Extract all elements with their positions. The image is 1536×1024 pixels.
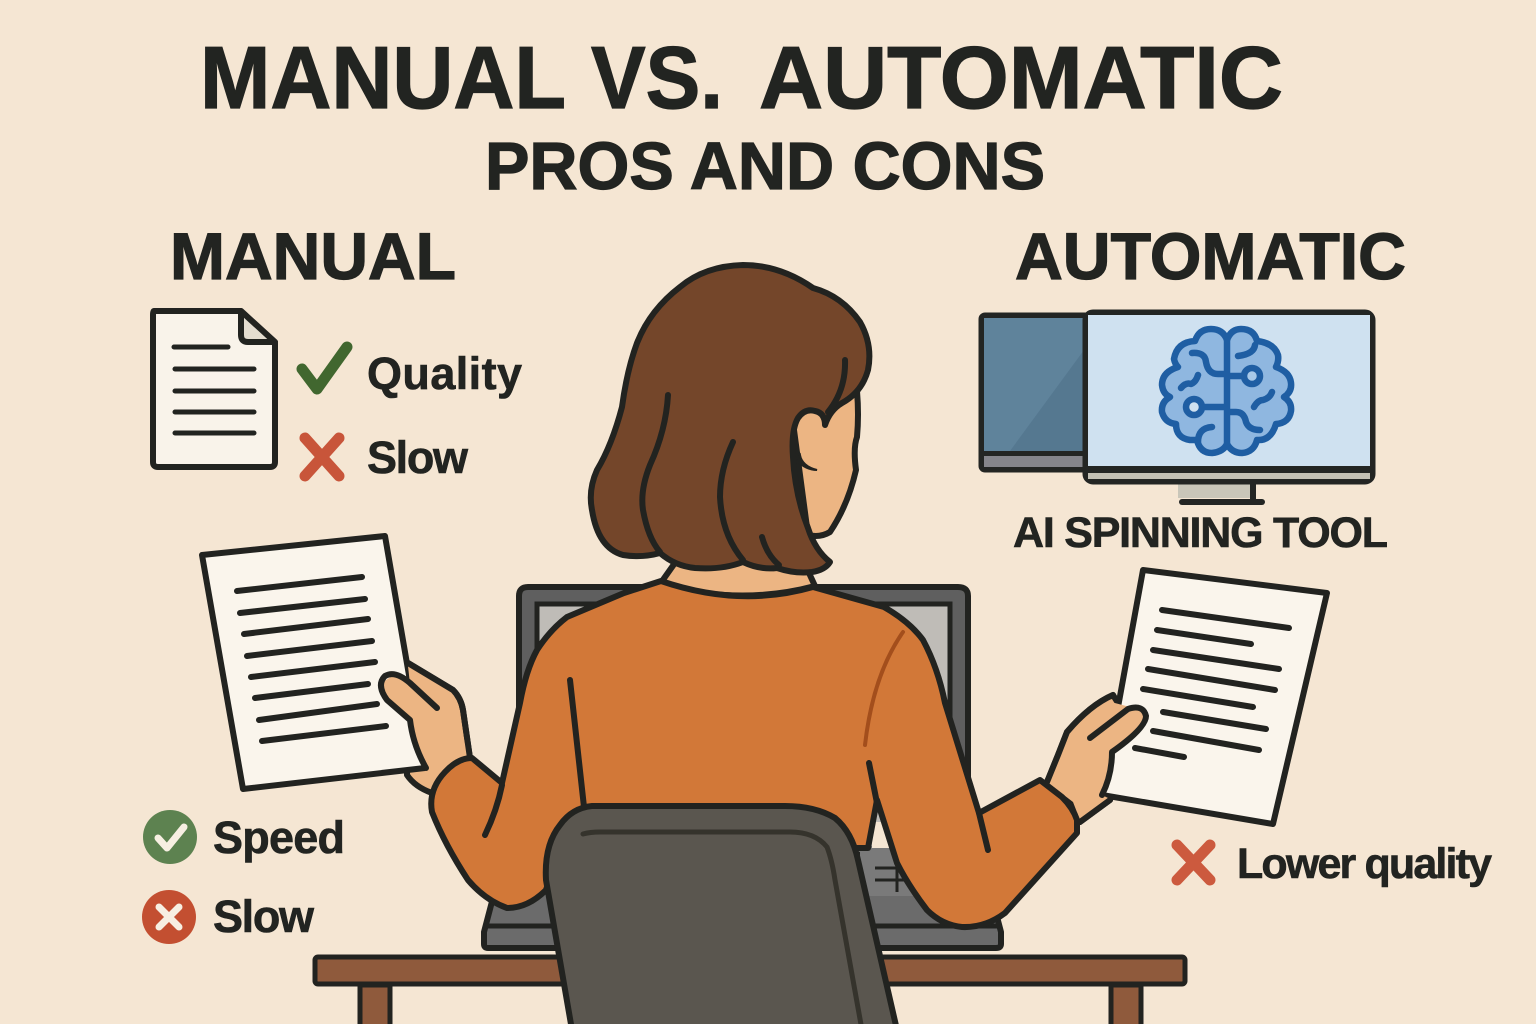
label: speed: Speed xyxy=(213,812,345,863)
label: slow: Slow xyxy=(213,891,315,942)
label: quality: Quality xyxy=(367,348,522,399)
label: slow: Slow xyxy=(367,432,469,483)
icon: green check circle xyxy=(143,810,197,864)
chair xyxy=(546,806,897,1024)
hair xyxy=(591,265,869,572)
left hand holding paper xyxy=(202,536,470,793)
icon: brain xyxy=(1162,329,1291,453)
paper: right xyxy=(1102,570,1327,824)
sweater xyxy=(431,581,1077,927)
title: AUTOMATIC xyxy=(759,28,1283,127)
subtitle: PROS AND CONS xyxy=(485,129,1045,204)
label: AI spinning tool: AI SPINNING TOOL xyxy=(1013,509,1388,557)
icon: back monitor xyxy=(981,315,1089,470)
icon: front monitor with brain xyxy=(1085,312,1373,502)
icon: green check xyxy=(302,347,347,389)
title: MANUAL xyxy=(200,28,566,127)
right hand holding paper xyxy=(1047,570,1327,824)
neck xyxy=(660,560,815,596)
heading: manual: MANUAL xyxy=(170,219,456,293)
icon: red cross xyxy=(1177,845,1210,880)
icon: red cross xyxy=(305,438,339,476)
desk xyxy=(315,957,1185,1024)
laptop xyxy=(484,587,1001,948)
person xyxy=(431,265,1077,927)
label: lower quality: Lower quality xyxy=(1237,840,1492,888)
face and ear xyxy=(790,391,858,536)
paper: left xyxy=(202,536,425,789)
icon: red cross circle xyxy=(142,890,196,944)
icon: document xyxy=(153,311,275,467)
title: VS. xyxy=(591,28,723,127)
heading: automatic: AUTOMATIC xyxy=(1015,219,1406,293)
title xyxy=(200,28,1283,127)
